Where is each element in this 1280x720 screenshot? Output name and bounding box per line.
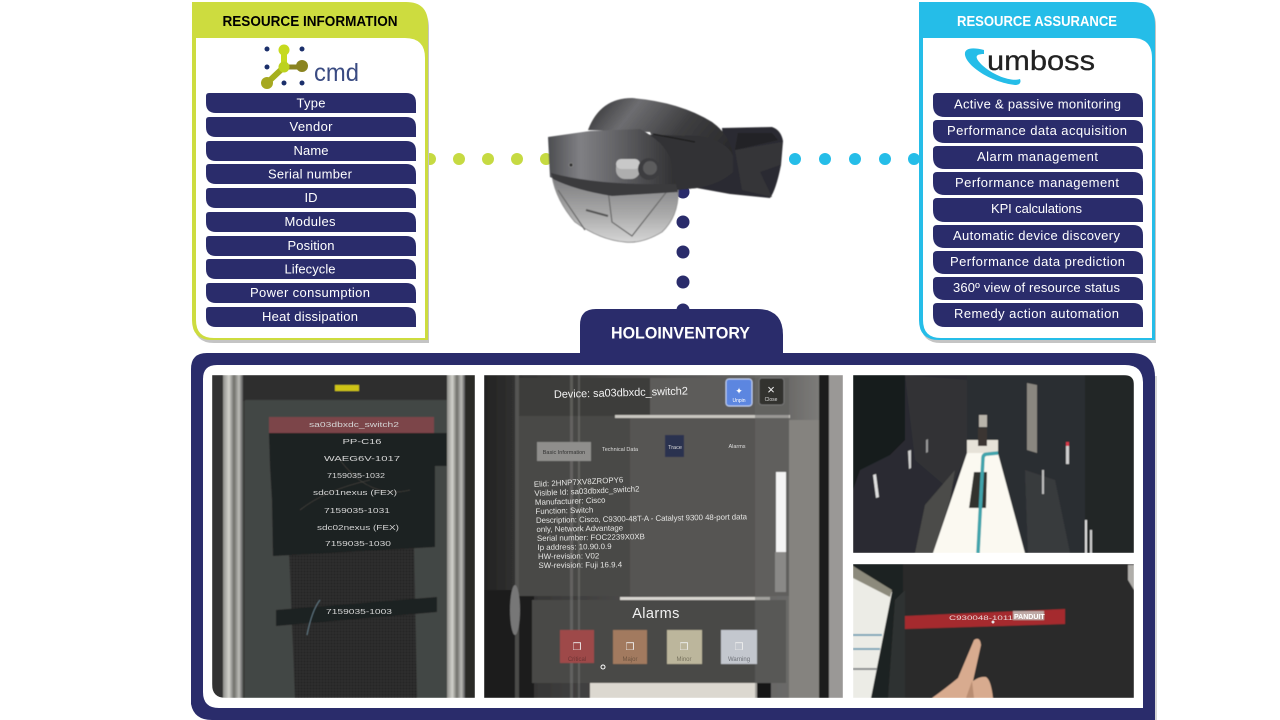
tab: holoinventory: HOLOINVENTORY (611, 324, 750, 342)
photo: device details hologram: Alarms (632, 606, 680, 622)
list: assurance functions: 360º view of resource status (953, 280, 1120, 295)
photo: device details hologram: ❒ (573, 642, 582, 653)
photo: device details hologram: ❒ (680, 642, 689, 653)
list: assurance functions: Remedy action automation (954, 306, 1119, 321)
hologram labels: PP-C16 (342, 437, 382, 446)
list: resource attributes: Lifecycle (284, 262, 336, 276)
panel: resource assurance (919, 2, 1156, 343)
photo: device details hologram: ❒ (735, 642, 744, 653)
connector dots: blue (789, 153, 920, 165)
photo: device details hologram: ✦ (735, 386, 743, 396)
photo: device details hologram: Close (765, 397, 778, 403)
photo: device details hologram: Minor (676, 657, 692, 663)
panel: resource information (192, 2, 429, 343)
device details text: Description: Cisco, C9300-48T-A - Catalyst 9300 48-port data (536, 512, 748, 525)
photo: rack with holographic labels (212, 375, 475, 698)
headset strap (697, 127, 783, 198)
connector dots: green (424, 153, 552, 165)
photo: device details hologram: × (767, 382, 775, 397)
list: resource attributes: ID (304, 190, 318, 205)
list: resource attributes: Vendor (290, 119, 333, 134)
device details text (534, 475, 748, 570)
headset dome (588, 98, 733, 190)
list: assurance functions: Performance data acquisition (947, 123, 1127, 138)
front visor (548, 129, 677, 192)
photo: data centre corridor with route line (853, 375, 1134, 553)
list: resource attributes (206, 93, 416, 327)
hologram labels: sdc02nexus (FEX) (317, 523, 400, 532)
list: resource attributes: Type (296, 96, 326, 110)
photo: device details hologram: Unpin (732, 398, 746, 404)
list: resource attributes: Serial number (268, 166, 353, 182)
device details text: SW-revision: Fuji 16.9.4 (538, 560, 623, 570)
photo: device details hologram: Device: sa03dbxdc_switch2 (554, 385, 688, 401)
heading: resource information: RESOURCE INFORMATION (222, 13, 398, 30)
photo: device details hologram: Technical Data (602, 447, 639, 453)
device details text: only, Network Advantage (536, 523, 624, 534)
device details text: Visible Id: sa03dbxdc_switch2 (534, 484, 640, 498)
hologram labels: sdc01nexus (FEX) (313, 488, 398, 497)
device details text: Function: Switch (535, 505, 593, 516)
device details text: Serial number: FOC2239X0XB (537, 532, 645, 543)
photo: finger pointing at rack label (853, 564, 1134, 698)
photo: finger pointing at rack label: C930048-1011 (949, 615, 1013, 622)
photo: device details hologram: Alarms (728, 444, 746, 450)
list: assurance functions: Alarm management (977, 149, 1098, 164)
photo: device details hologram: Critical (568, 657, 586, 663)
device details text: HW-revision: V02 (538, 551, 599, 561)
tab: holoinventory (580, 309, 783, 354)
hologram labels: WAEG6V-1017 (324, 454, 400, 463)
photo: device details hologram: Trace (668, 445, 682, 451)
photo: device details hologram (484, 375, 843, 698)
device details text: Manufacturer: Cisco (535, 496, 606, 507)
photo: finger pointing at rack label: PANDUIT (1014, 614, 1045, 621)
list: assurance functions: Automatic device discovery (953, 228, 1120, 243)
photo: device details hologram: Basic Information (543, 450, 585, 456)
logo: cmd (261, 44, 359, 89)
side body (620, 134, 733, 190)
list: resource attributes: Power consumption (250, 285, 370, 300)
device details text: Elid: 2HNP7XV8ZROPY6 (534, 475, 624, 489)
photo: device details hologram: Major (622, 657, 638, 663)
list: assurance functions: Active & passive monitoring (954, 96, 1121, 112)
hologram labels (309, 420, 400, 616)
list: assurance functions: Performance data prediction (950, 254, 1125, 269)
device details text: Ip address: 10.90.0.9 (537, 542, 612, 552)
panel: holoinventory photos (191, 353, 1157, 720)
list: assurance functions: KPI calculations (991, 201, 1082, 216)
photo: device details hologram: Warning (728, 657, 750, 663)
list: assurance functions (933, 93, 1143, 327)
list: resource attributes: Heat dissipation (262, 309, 358, 324)
hologram labels: 7159035-1031 (324, 506, 390, 515)
hologram labels: 7159035-1032 (327, 471, 385, 480)
list: assurance functions: Performance management (955, 175, 1119, 190)
hologram labels: 7159035-1030 (325, 539, 391, 548)
transparent lens (552, 176, 678, 242)
hologram labels: sa03dbxdc_switch2 (309, 420, 399, 429)
heading: resource assurance: RESOURCE ASSURANCE (957, 13, 1117, 30)
icon: mixed reality headset (548, 98, 783, 242)
list: resource attributes: Position (288, 238, 334, 253)
photo: device details hologram: ❒ (626, 642, 635, 653)
connector dots: navy (676, 186, 690, 316)
logo: umboss: umboss (987, 45, 1095, 76)
list: resource attributes: Modules (284, 214, 336, 229)
hologram labels: 7159035-1003 (326, 607, 392, 616)
list: resource attributes: Name (294, 143, 328, 158)
logo: cmd: cmd (314, 59, 359, 87)
logo: umboss (965, 45, 1095, 85)
